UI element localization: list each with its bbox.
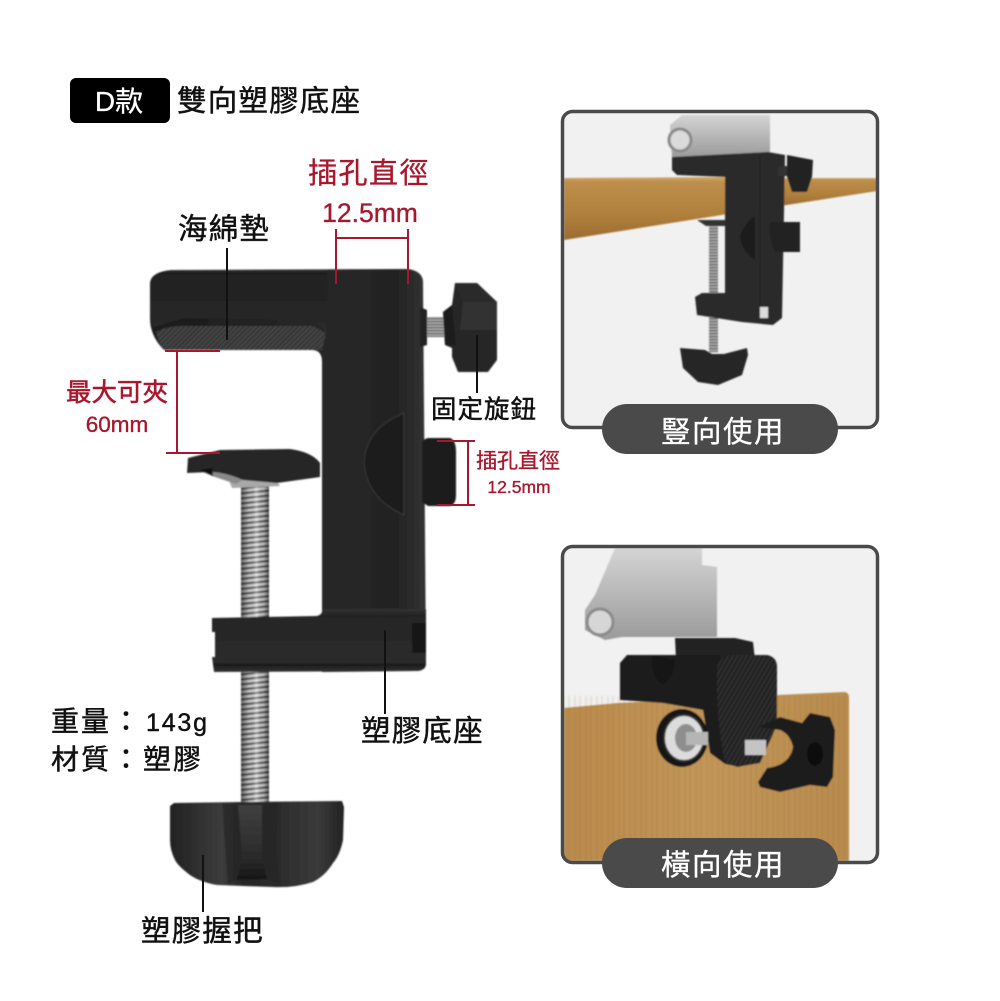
threaded rod bbox=[709, 222, 718, 352]
label pill: 豎向使用: 豎向使用 bbox=[661, 416, 785, 449]
callout: 最大可夾 60mm bbox=[66, 351, 220, 453]
label pill: 豎向使用 bbox=[602, 404, 838, 454]
callout: 固定旋鈕 bbox=[431, 335, 537, 424]
spec text: weight and material bbox=[51, 706, 209, 775]
panel: vertical use bbox=[562, 112, 878, 428]
spec text: weight and material: 塑膠 bbox=[143, 744, 203, 775]
wooden desk bbox=[564, 177, 877, 240]
grip pad bbox=[717, 655, 777, 767]
upper arm and body bbox=[150, 269, 426, 672]
bottom handle bbox=[680, 348, 748, 385]
callout: 塑膠底座 bbox=[361, 630, 484, 748]
clamp mounted bbox=[620, 638, 835, 792]
clamp pressure plate bbox=[187, 449, 320, 488]
upper arm bbox=[150, 270, 327, 332]
callout: 插孔直徑 12.5mm top bbox=[308, 157, 430, 284]
callout: 插孔直徑 12.5mm top: 插孔直徑 bbox=[308, 157, 430, 190]
callout: 插孔直徑 12.5mm side bbox=[437, 441, 560, 505]
panel: horizontal use bbox=[562, 546, 878, 862]
callout: 塑膠底座: 塑膠底座 bbox=[361, 715, 484, 748]
side socket bbox=[782, 220, 802, 254]
arc detail bbox=[740, 218, 754, 258]
spec text: weight and material: ： bbox=[112, 706, 142, 737]
callout: 海綿墊 bbox=[178, 213, 270, 340]
callout: 海綿墊: 海綿墊 bbox=[178, 213, 270, 246]
clamp block bbox=[620, 655, 740, 767]
spec text: weight and material: ： bbox=[112, 744, 142, 775]
label pill: 橫向使用 bbox=[602, 838, 838, 888]
product photo: plastic clamp bbox=[150, 269, 497, 887]
small knob bbox=[778, 155, 813, 192]
sponge pad bbox=[156, 326, 326, 350]
wooden desk bbox=[564, 692, 849, 861]
callout: 固定旋鈕: 固定旋鈕 bbox=[431, 396, 537, 424]
lower arm bbox=[212, 609, 426, 672]
small side screw bbox=[425, 317, 447, 337]
callout: 最大可夾 60mm: 最大可夾 bbox=[66, 379, 168, 407]
bottom handle bbox=[170, 801, 344, 887]
spec text: weight and material: 143g bbox=[146, 709, 209, 737]
slot bbox=[760, 307, 768, 318]
ghost monitor arm bbox=[585, 548, 717, 640]
title badge: D款: D款 bbox=[95, 86, 143, 117]
arc detail bbox=[652, 655, 675, 685]
title badge: D款 bbox=[70, 78, 170, 123]
label pill: 橫向使用: 橫向使用 bbox=[661, 849, 785, 882]
callout: 塑膠握把: 塑膠握把 bbox=[141, 915, 264, 948]
tightening knob bbox=[443, 283, 497, 372]
callout: 插孔直徑 12.5mm side: 12.5mm bbox=[487, 477, 551, 497]
knob bbox=[758, 713, 835, 792]
callout: 最大可夾 60mm: 60mm bbox=[86, 412, 148, 437]
top cap bbox=[675, 638, 755, 660]
plate under desk bbox=[697, 220, 726, 226]
heading: 雙向塑膠底座: 雙向塑膠底座 bbox=[177, 85, 361, 118]
body arc detail bbox=[364, 413, 404, 515]
callout: 插孔直徑 12.5mm side: 插孔直徑 bbox=[476, 450, 560, 473]
screw bbox=[745, 740, 766, 755]
callout: 插孔直徑 12.5mm top: 12.5mm bbox=[322, 198, 418, 228]
spec text: weight and material: 重量 bbox=[51, 706, 111, 737]
spec text: weight and material: 材質 bbox=[51, 744, 111, 775]
side socket bbox=[422, 438, 456, 506]
threaded screw bbox=[241, 482, 269, 804]
chrome nut bbox=[656, 709, 708, 767]
clamp mounted bbox=[672, 152, 785, 325]
callout: 塑膠握把 bbox=[141, 855, 264, 948]
ghost monitor arm bbox=[669, 115, 770, 157]
